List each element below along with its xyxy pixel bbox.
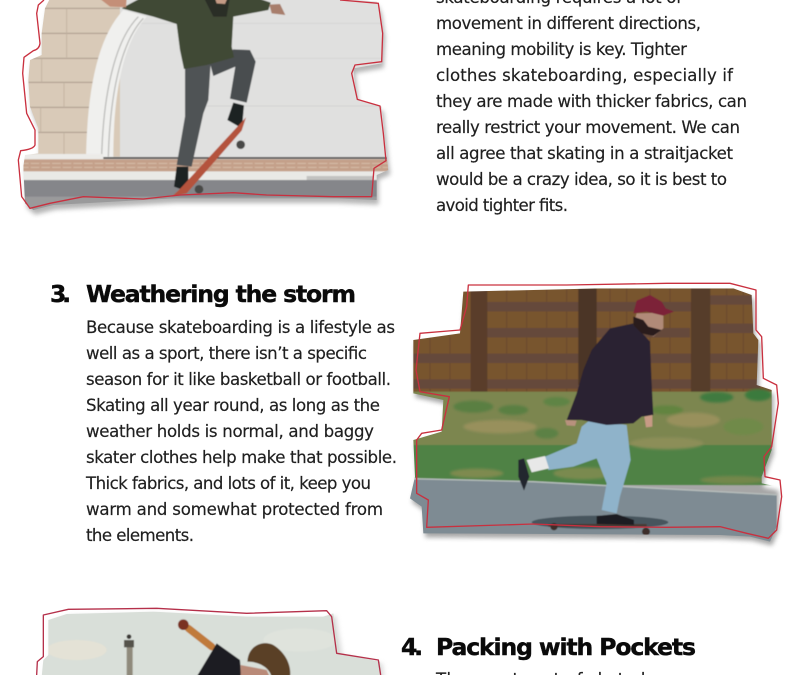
text: section 2 body: clothes skateboarding, especially if [436,66,734,85]
shape shadow [412,292,779,546]
text: section 3 body: Because skateboarding is a lifestyle as [86,318,395,337]
board and shadow [532,516,668,529]
heading: 4. Packing with Pockets: 4. [401,633,423,661]
shirt [197,643,241,675]
text: section 3 body: skater clothes help make that possible. [86,448,397,467]
text: section 2 body: avoid tighter fits. [436,196,568,215]
neck and hair [241,665,270,675]
text: section 3 body: the elements. [86,526,194,545]
heading: 3. Weathering the storm: 3. [50,280,71,308]
shape shadow [44,614,384,675]
skateboard [172,117,246,197]
grass [413,391,772,446]
text: section 2 body: all agree that skating in a straitjacket [436,144,733,163]
hands [99,0,127,7]
photo scene [42,612,380,675]
text: section 3 body: well as a sport, there isn’t a specific [86,344,367,363]
hands [644,415,652,427]
arm and fist [188,628,212,647]
red outline [416,283,782,538]
sock and shoes [527,456,549,472]
lamp post [127,647,133,675]
text: section 2 body: really restrict your movement. We can [436,118,740,137]
text: section 2 body: would be a crazy idea, so it is best to [436,170,727,189]
head and cap [633,313,663,337]
text: section 3 body: Skating all year round, as long as the [86,396,380,415]
jeans [177,63,211,167]
photo scene [410,288,776,542]
heading: 4. Packing with Pockets: Packing with Pockets [436,633,696,661]
photo: skater pushing past a wooden fence [400,283,800,547]
jeans [545,420,631,513]
road [410,479,776,542]
text: section 2 body: meaning mobility is key. Tighter [436,40,687,59]
text: section 2 body [436,0,747,215]
jacket [122,0,271,69]
photo scene [17,0,400,213]
shoes [174,167,188,191]
hoodie [567,323,653,425]
shape shadow [25,3,390,215]
text: section 3 body: season for it like basketball or football. [86,370,391,389]
photo: skateboarder jumping by a white arch [17,0,400,215]
red outline [37,608,381,675]
text: section 3 body: warm and somewhat protected from [86,500,383,519]
text: section 2 body: movement in different directions, [436,14,701,33]
photo: skater with curly hair against the sky [33,607,400,675]
text: section 3 body [85,318,397,545]
text: section 3 body: Thick fabrics, and lots of it, keep you [85,474,371,493]
heading: 3. Weathering the storm: Weathering the storm [86,280,356,308]
red outline [18,0,386,208]
text: section 2 body: they are made with thicker fabrics, can [436,92,747,111]
text: section 3 body: weather holds is normal, and baggy [86,422,374,441]
fence [413,288,772,392]
